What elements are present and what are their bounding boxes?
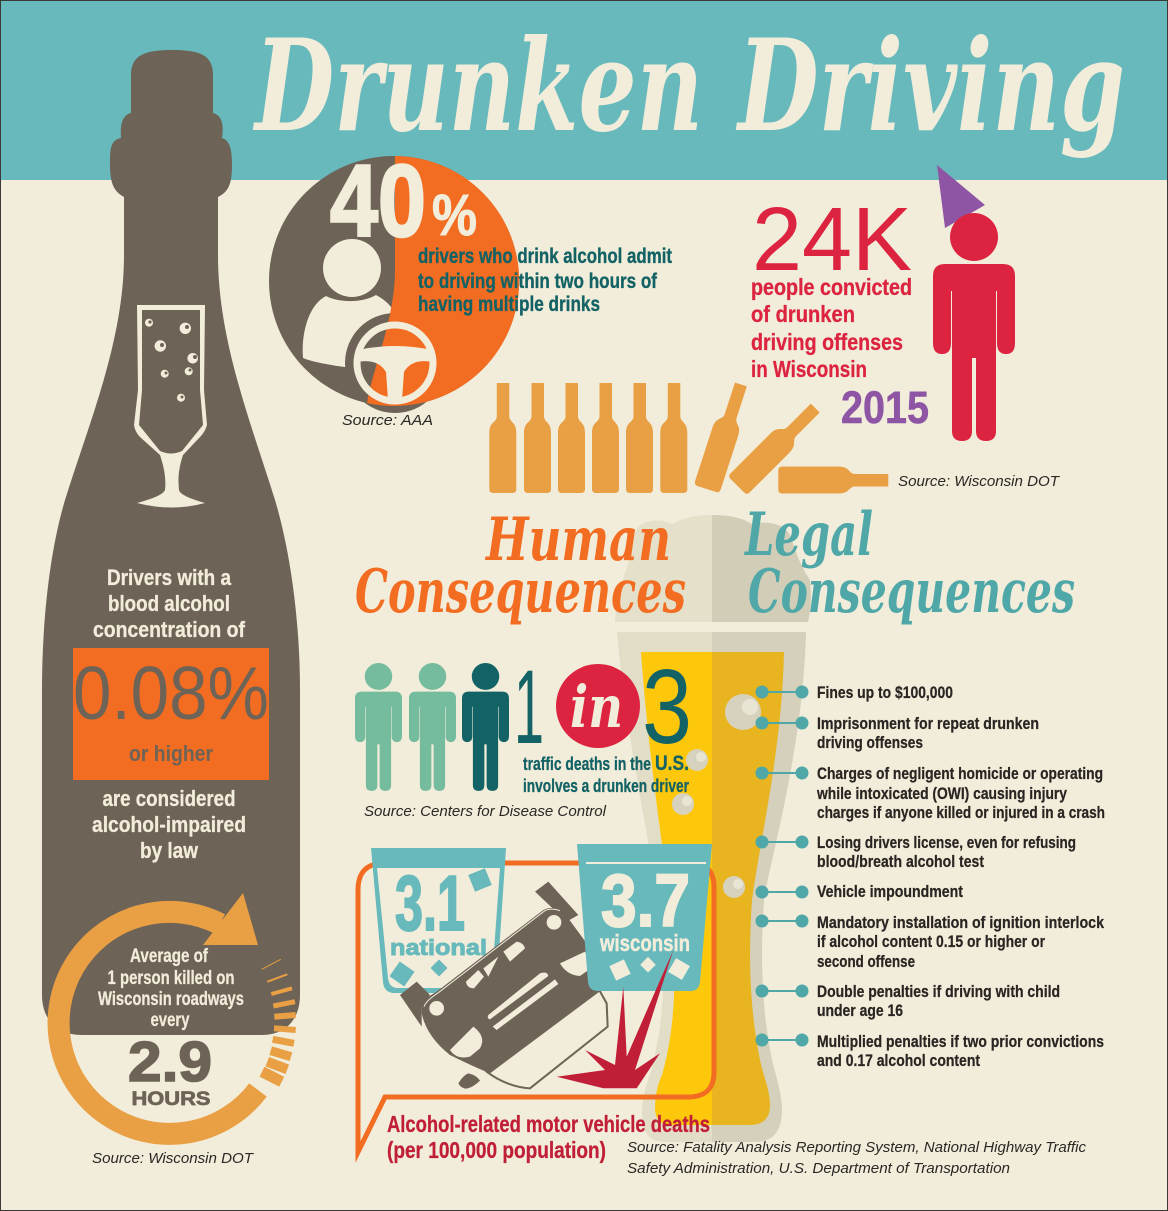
legal consequences list: charges if anyone killed or injured in a crash <box>817 803 1105 822</box>
legal consequences list: Multiplied penalties if two prior convictions <box>817 1032 1104 1051</box>
legal consequences list: under age 16 <box>817 1001 903 1020</box>
wisconsin cup: 3.7 <box>601 859 690 942</box>
stat: 24K: 24K <box>752 190 912 290</box>
text: average killed: Average of <box>130 946 209 967</box>
callout: 0.08% box: 0.08% <box>73 651 269 735</box>
wisconsin cup <box>577 844 712 991</box>
text: drivers with a blood alcohol concentration: concentration of <box>93 617 246 642</box>
text: drivers who drink: having multiple drinks <box>418 293 600 316</box>
stat: 1 in 3: in <box>570 673 623 741</box>
text: are considered alcohol-impaired by law: by law <box>140 838 199 863</box>
wisconsin cup: wisconsin <box>599 930 690 956</box>
beer glass <box>615 515 811 1142</box>
stat: 2.9 hours: 2.9 <box>128 1030 212 1094</box>
icon: overturned car <box>400 882 608 1089</box>
legal consequences list: Losing drivers license, even for refusing <box>817 833 1076 852</box>
text: alcohol-related deaths <box>387 1111 710 1163</box>
text: drivers who drink: drivers who drink alcohol admit <box>418 245 672 268</box>
national cup <box>371 848 506 993</box>
year: 2015: 2015 <box>841 382 929 433</box>
text: are considered alcohol-impaired by law: alcohol-impaired <box>92 812 246 837</box>
text: average killed: Wisconsin roadways <box>98 989 244 1010</box>
legal consequences list <box>816 683 1105 1070</box>
speech bubble frame <box>358 863 714 1152</box>
source: CDC: Source: Centers for Disease Control <box>364 803 607 820</box>
connector dots <box>756 686 808 1046</box>
source: Wisconsin DOT: Source: Wisconsin DOT <box>92 1150 255 1167</box>
stat: 40%: % <box>432 183 477 248</box>
stat: 1 in 3: 3 <box>642 648 692 766</box>
heading: legal consequences <box>744 500 1075 627</box>
national cup: national <box>390 935 487 960</box>
source: AAA: Source: AAA <box>342 412 433 429</box>
title: Drunken <box>253 12 703 160</box>
icon: row of bottles falling over <box>489 380 888 495</box>
text: traffic deaths <box>523 752 689 796</box>
source: fatality reporting <box>627 1139 1086 1177</box>
legal consequences list: while intoxicated (OWI) causing injury <box>816 784 1067 803</box>
icon: driver <box>303 239 394 368</box>
legal consequences list: blood/breath alcohol test <box>817 852 984 871</box>
text: average killed: 1 person killed on <box>108 968 234 989</box>
legal consequences list: if alcohol content 0.15 or higher or <box>817 932 1045 951</box>
clock arrow ring <box>59 893 296 1134</box>
legal consequences list: and 0.17 alcohol content <box>817 1051 980 1070</box>
legal consequences list: Fines up to $100,000 <box>817 683 953 702</box>
text: drivers with a blood alcohol concentration: blood alcohol <box>108 591 230 616</box>
text: drivers who drink: to driving within two hours of <box>418 270 658 293</box>
callout: 0.08% box: or higher <box>129 741 213 766</box>
source: fatality reporting: Safety Administration, U.S. Department of Transportation <box>627 1160 1010 1177</box>
text: average killed <box>98 946 244 1031</box>
heading: human consequences: Human <box>484 505 671 575</box>
heading: human consequences <box>355 505 686 627</box>
text: people convicted: of drunken <box>751 301 855 327</box>
text: drivers who drink <box>418 245 672 316</box>
legal consequences list: Imprisonment for repeat drunken <box>817 714 1039 733</box>
text: people convicted: in Wisconsin <box>751 356 867 382</box>
callout: 0.08% box <box>73 648 269 780</box>
legal consequences list: second offense <box>817 952 915 971</box>
text: people convicted <box>751 274 912 382</box>
stat: 2.9 hours: HOURS <box>132 1089 210 1110</box>
source: Wisconsin DOT: Source: Wisconsin DOT <box>898 473 1061 490</box>
icon: three people <box>355 663 509 791</box>
text: alcohol-related deaths: (per 100,000 population) <box>387 1137 606 1163</box>
legal consequences list: driving offenses <box>817 733 923 752</box>
icon: champagne glass <box>134 305 207 508</box>
wine bottle panel <box>42 50 300 1035</box>
text: average killed: every <box>150 1010 190 1031</box>
text: drivers with a blood alcohol concentration <box>93 565 246 642</box>
stat: 1 in 3 <box>514 648 692 766</box>
heading: human consequences: Consequences <box>355 557 686 627</box>
national cup: 3.1 <box>395 859 465 947</box>
text: alcohol-related deaths: Alcohol-related motor vehicle deaths <box>387 1111 710 1137</box>
text: traffic deaths: involves a drunken driver <box>523 776 689 796</box>
source: fatality reporting: Source: Fatality Analysis Reporting System, National Highway Traffic <box>627 1139 1086 1156</box>
legal consequences list: Charges of negligent homicide or operating <box>817 764 1103 783</box>
pie chart: 40 percent <box>269 156 519 413</box>
text: traffic deaths: traffic deaths in the <box>523 754 651 774</box>
text: traffic deaths: U.S. <box>655 752 689 775</box>
text: are considered alcohol-impaired by law: are considered <box>102 786 236 811</box>
text: drivers with a blood alcohol concentration: Drivers with a <box>107 565 232 590</box>
text: are considered alcohol-impaired by law <box>92 786 246 863</box>
text: people convicted: driving offenses <box>751 329 903 355</box>
icon: party person <box>933 165 1015 441</box>
icon: crash burst <box>557 950 673 1088</box>
legal consequences list: Vehicle impoundment <box>817 882 963 901</box>
text: people convicted: people convicted <box>751 274 912 300</box>
heading: legal consequences: Legal <box>744 500 873 570</box>
legal consequences list: Double penalties if driving with child <box>817 982 1060 1001</box>
icon: steering wheel <box>357 325 433 401</box>
stat: 1 in 3: 1 <box>514 649 544 766</box>
title banner <box>0 0 1168 180</box>
stat: 40%: 40 <box>330 144 426 258</box>
legal consequences list: Mandatory installation of ignition interlock <box>817 913 1104 932</box>
